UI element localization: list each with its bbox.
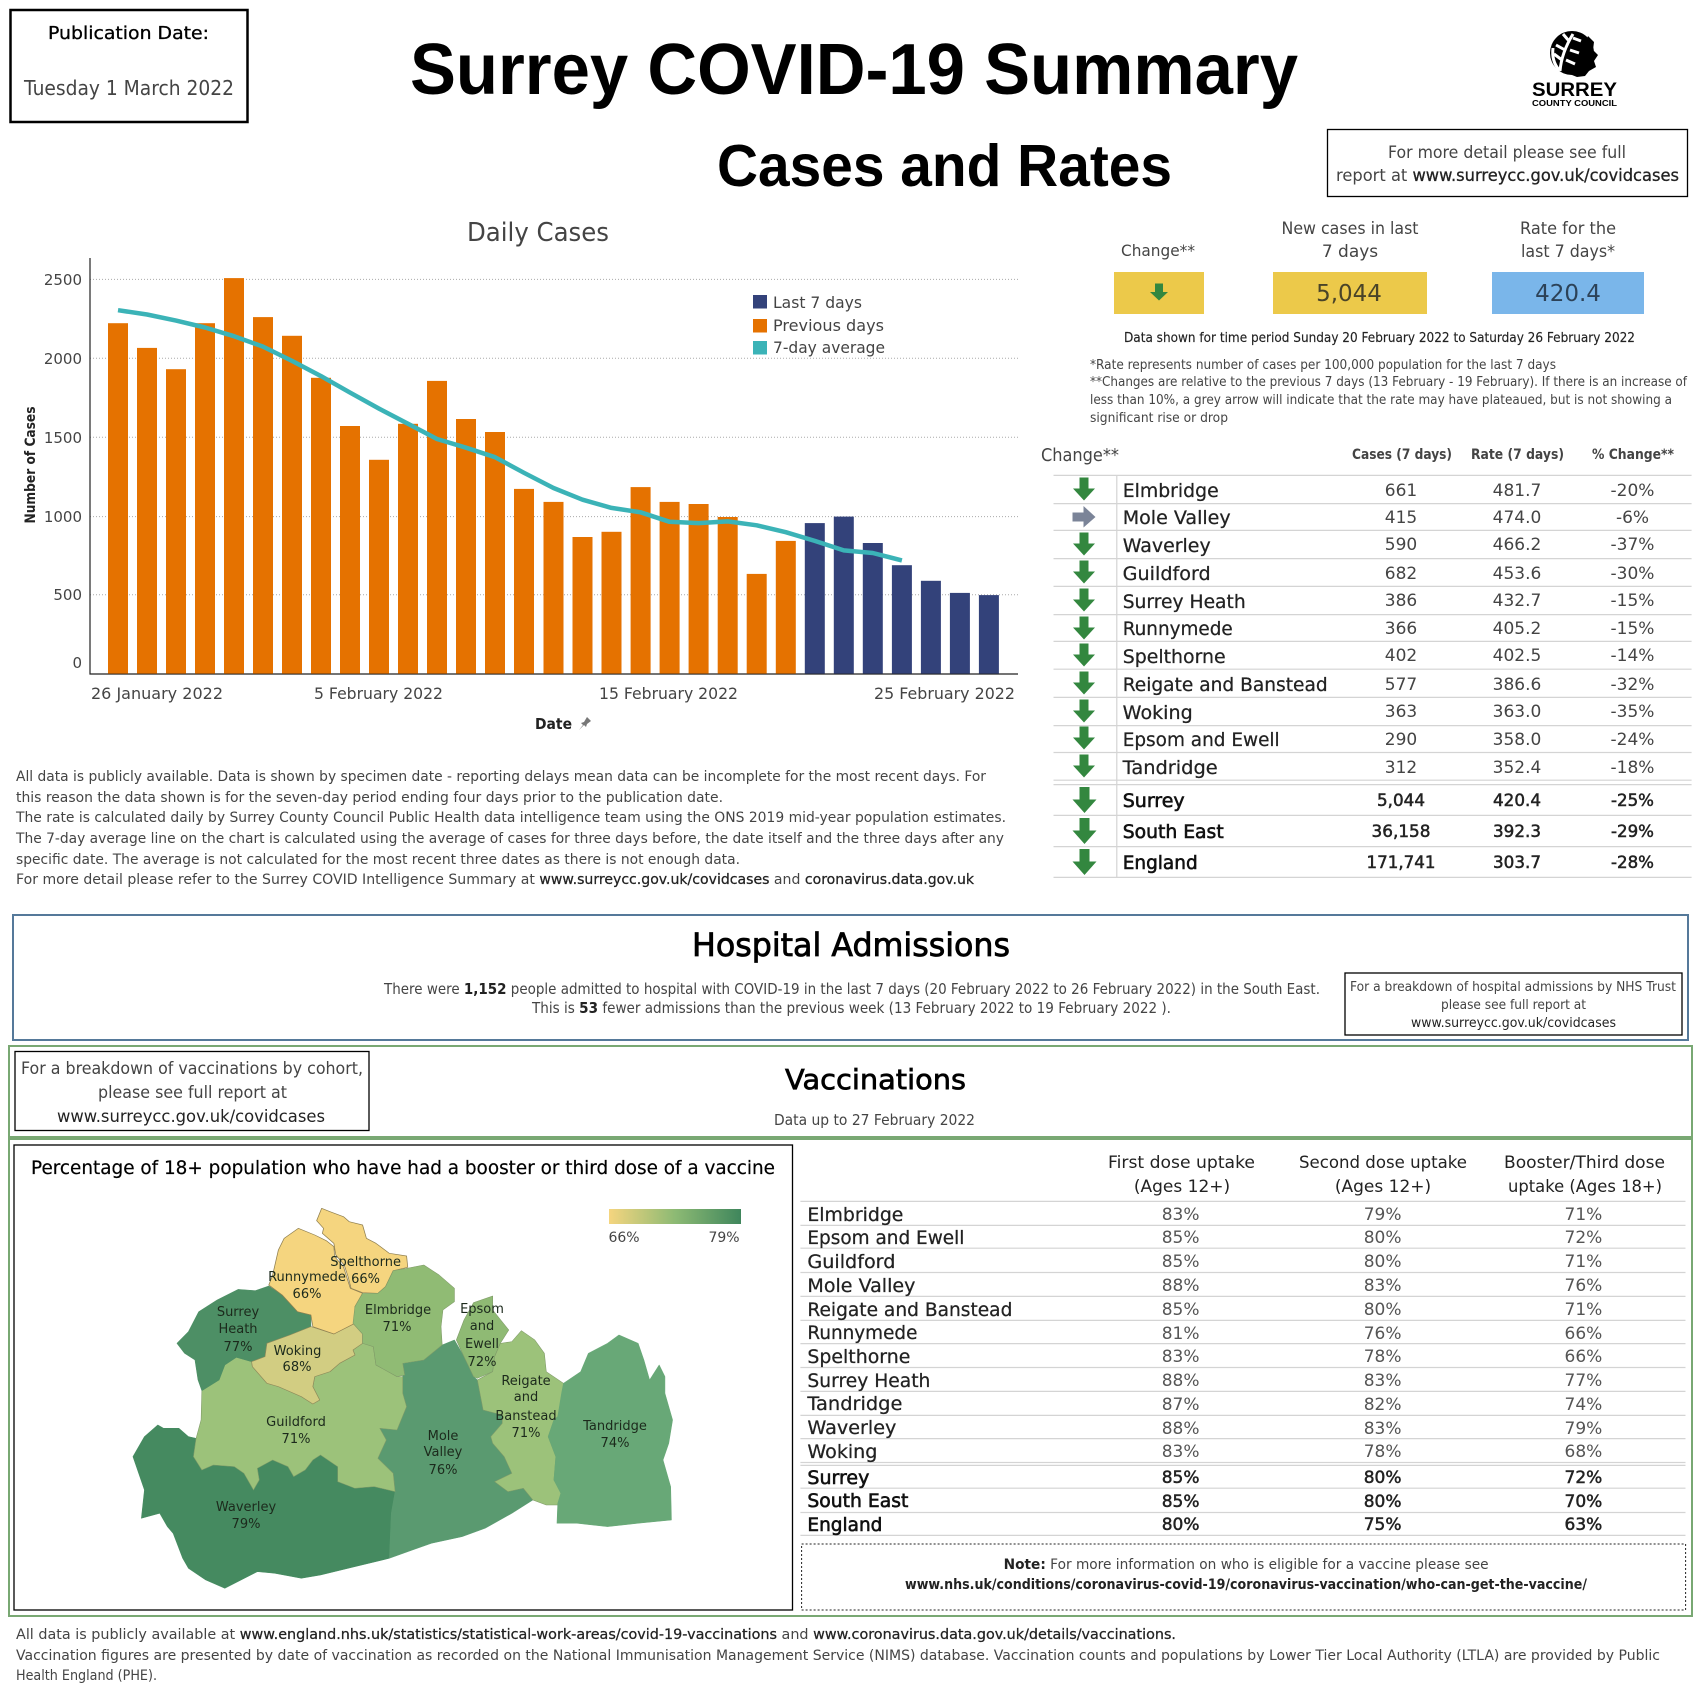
callout: more detail: report at www.surreycc.gov.uk/covidcases — [1336, 166, 1679, 186]
row: Tandridge: Tandridge — [1122, 757, 1218, 779]
map labels: Epsom — [460, 1302, 504, 1317]
map legend: 79% — [708, 1230, 740, 1246]
text block: chart notes: specific date. The average is not calculated for the most recent three dates as there is not enough data. — [16, 852, 740, 868]
data period note: Data shown for time period Sunday 20 February 2022 to Saturday 26 February 2022 — [1124, 330, 1635, 346]
row: Reigate and Banstead: -32% — [1611, 675, 1654, 695]
panel: booster uptake map — [14, 1145, 792, 1610]
row: Spelthorne: 402 — [1385, 646, 1417, 666]
callout: vaccination breakdown: please see full report at — [98, 1083, 287, 1103]
row: Reigate and Banstead: 577 — [1385, 675, 1417, 695]
legend: Last 7 days — [773, 293, 862, 312]
chart title: Daily Cases — [467, 218, 609, 248]
row: Epsom and Ewell: 290 — [1385, 730, 1417, 750]
row: England: 171,741 — [1366, 853, 1436, 873]
callout: vaccine eligibility note: Note: For more information on who is eligible for a vaccine please see — [1004, 1557, 1489, 1573]
row: Epsom and Ewell — [807, 1227, 1602, 1249]
row: South East: 85% — [1162, 1492, 1199, 1512]
row: Spelthorne: 83% — [1162, 1347, 1199, 1367]
row: Reigate and Banstead: 386.6 — [1493, 675, 1541, 695]
row: Surrey: 80% — [1364, 1468, 1401, 1488]
text block: chart notes: this reason the data shown is for the seven-day period ending four days prior to the publication date. — [16, 790, 723, 806]
row: Runnymede — [807, 1322, 1602, 1344]
row: Woking — [1073, 700, 1654, 724]
publication date box — [10, 10, 248, 122]
vaccination table header: Second dose uptake — [1299, 1153, 1467, 1173]
map labels: and — [470, 1319, 494, 1334]
map labels: Valley — [424, 1445, 463, 1460]
y-axis labels: 0 — [72, 654, 82, 672]
row: Waverley: 466.2 — [1493, 535, 1541, 555]
text block: vaccination sources: All data is publicly available at www.england.nhs.uk/statistics/statistical-work-areas/covid-19-vaccinations and www.coronavirus.data.gov.uk/details/vaccinations. — [16, 1627, 1176, 1643]
row: Surrey — [807, 1467, 1602, 1489]
map labels: Mole — [428, 1429, 458, 1444]
row: South East: 392.3 — [1493, 822, 1541, 842]
row: England: 75% — [1364, 1515, 1401, 1535]
callout: more detail: For more detail please see full — [1388, 143, 1626, 163]
row: Spelthorne: 402.5 — [1493, 646, 1541, 666]
vaccination table header — [1108, 1153, 1665, 1197]
row: England: England — [807, 1514, 882, 1536]
data date: Data up to 27 February 2022 — [774, 1111, 975, 1129]
row: Tandridge: Tandridge — [806, 1393, 902, 1415]
map title: Percentage of 18+ population who have had a booster or third dose of a vaccine — [31, 1157, 775, 1179]
map labels: Ewell — [465, 1337, 499, 1352]
hospital summary text: There were 1,152 people admitted to hospital with COVID-19 in the last 7 days (20 February 2022 to 26 February 2022) in the South East. — [383, 980, 1320, 998]
callout: vaccine eligibility note — [802, 1544, 1686, 1610]
row: Woking: 363.0 — [1493, 702, 1541, 722]
row: Spelthorne — [1073, 644, 1654, 668]
row: Waverley: 590 — [1385, 535, 1417, 555]
text block: chart notes: All data is publicly available. Data is shown by specimen date - reporting delays mean data can be incomplete for the most recent days. For — [16, 769, 986, 785]
row: Runnymede: 76% — [1364, 1324, 1401, 1344]
row: Mole Valley — [1072, 506, 1649, 529]
KPI: new cases: New cases in last — [1282, 219, 1419, 239]
row: Surrey Heath: 83% — [1364, 1371, 1401, 1391]
row: Guildford: -30% — [1611, 564, 1654, 584]
x-axis labels: 26 January 2022 — [91, 684, 223, 703]
row: Tandridge: -18% — [1611, 758, 1654, 778]
panel: vaccinations header — [9, 1046, 1692, 1137]
map labels: 76% — [429, 1463, 457, 1478]
row: Waverley — [1073, 532, 1654, 557]
row: South East: 80% — [1364, 1492, 1401, 1512]
title: Surrey COVID-19 Summary — [410, 30, 1298, 110]
row: Reigate and Banstead: 80% — [1364, 1300, 1401, 1320]
text block: vaccination sources: Health England (PHE). — [16, 1668, 157, 1684]
row: Epsom and Ewell — [1073, 726, 1654, 751]
row: Mole Valley: -6% — [1616, 508, 1649, 528]
legend: 7-day average — [773, 338, 885, 357]
row: Runnymede: Runnymede — [1123, 618, 1233, 640]
map labels: 71% — [383, 1320, 411, 1335]
row: Spelthorne: 78% — [1364, 1347, 1401, 1367]
row: Runnymede: Runnymede — [807, 1322, 917, 1344]
row: Surrey: Surrey — [807, 1467, 869, 1489]
publication date box: Publication Date: — [48, 23, 209, 44]
row: Surrey Heath: Surrey Heath — [807, 1370, 930, 1392]
row: South East: 70% — [1565, 1492, 1602, 1512]
row: Tandridge — [806, 1393, 1602, 1415]
x-axis labels — [91, 684, 1015, 703]
row: Guildford: Guildford — [1123, 563, 1211, 585]
legend: Previous days — [773, 316, 884, 335]
row: Waverley: -37% — [1611, 535, 1654, 555]
callout: hospital breakdown: For a breakdown of hospital admissions by NHS Trust — [1350, 980, 1676, 995]
row: Waverley: 79% — [1565, 1419, 1602, 1439]
row: Elmbridge: 71% — [1565, 1205, 1602, 1225]
row: Guildford: 85% — [1162, 1252, 1199, 1272]
row: Runnymede: 81% — [1162, 1324, 1199, 1344]
KPI: new cases: 7 days — [1322, 242, 1378, 262]
x-axis labels: 25 February 2022 — [874, 684, 1015, 703]
row: Spelthorne: Spelthorne — [1123, 646, 1226, 668]
table header: Rate (7 days) — [1471, 447, 1564, 463]
row: Surrey Heath: 88% — [1162, 1371, 1199, 1391]
heading: vaccinations: Vaccinations — [785, 1063, 966, 1096]
row: Mole Valley: 76% — [1565, 1276, 1602, 1296]
row: Elmbridge — [807, 1204, 1602, 1226]
y-axis labels: 2000 — [44, 350, 82, 368]
KPI: change — [1114, 241, 1204, 314]
row: England — [1072, 849, 1654, 875]
table header — [1041, 445, 1675, 466]
callout: vaccination breakdown: www.surreycc.gov.uk/covidcases — [57, 1107, 325, 1127]
line: 7-day average — [118, 310, 902, 560]
row: Reigate and Banstead — [807, 1299, 1602, 1321]
map labels: 77% — [224, 1340, 252, 1355]
row: Mole Valley — [807, 1275, 1602, 1297]
callout: hospital breakdown: www.surreycc.gov.uk/covidcases — [1411, 1016, 1616, 1031]
row: Reigate and Banstead — [1073, 672, 1654, 696]
vaccination table header: Booster/Third dose — [1504, 1153, 1665, 1173]
row: Guildford — [1073, 560, 1654, 585]
y-axis labels: 1500 — [44, 429, 82, 447]
table: vaccination uptake — [800, 1153, 1686, 1536]
rate footnotes: *Rate represents number of cases per 100,000 population for the last 7 days — [1090, 358, 1556, 373]
row: Waverley: Waverley — [807, 1417, 896, 1439]
callout: more detail — [1328, 130, 1688, 196]
text block: chart notes — [15, 769, 1006, 888]
row: Guildford: 80% — [1364, 1252, 1401, 1272]
map labels: 68% — [283, 1360, 311, 1375]
row: Reigate and Banstead: 85% — [1162, 1300, 1199, 1320]
y-axis labels: 1000 — [44, 508, 82, 526]
publication date box: Tuesday 1 March 2022 — [23, 76, 234, 100]
row: Surrey Heath: Surrey Heath — [1123, 591, 1246, 613]
row: England: -28% — [1611, 853, 1654, 873]
y-axis labels — [44, 271, 82, 672]
row: England: 80% — [1162, 1515, 1199, 1535]
row: Runnymede: 366 — [1385, 619, 1417, 639]
map labels: Woking — [274, 1344, 321, 1359]
row: Elmbridge: 83% — [1162, 1205, 1199, 1225]
hospital summary text: This is 53 fewer admissions than the previous week (13 February 2022 to 19 February 2022 ). — [531, 999, 1171, 1017]
map labels: and — [514, 1390, 538, 1405]
row: Reigate and Banstead: Reigate and Banstead — [807, 1299, 1012, 1321]
row: Waverley: 88% — [1162, 1419, 1199, 1439]
map labels: 66% — [293, 1287, 321, 1302]
bars: last 7 days — [805, 517, 999, 674]
row: Surrey Heath — [1073, 588, 1654, 613]
row: Epsom and Ewell: 85% — [1162, 1228, 1199, 1248]
text block: vaccination sources — [16, 1627, 1660, 1684]
y-axis labels: 2500 — [44, 271, 82, 289]
row: Tandridge: 82% — [1364, 1395, 1401, 1415]
row: Mole Valley: 88% — [1162, 1276, 1199, 1296]
row: Tandridge: 352.4 — [1493, 758, 1541, 778]
map labels: Elmbridge — [365, 1303, 431, 1318]
rate footnotes: significant rise or drop — [1090, 411, 1228, 426]
row: Elmbridge: Elmbridge — [807, 1204, 903, 1226]
row: Guildford: Guildford — [807, 1251, 895, 1273]
row: Tandridge — [1073, 754, 1654, 779]
rate footnotes: less than 10%, a grey arrow will indicate that the rate may have plateaued, but is not showing a — [1090, 393, 1672, 408]
row: Runnymede: 66% — [1565, 1324, 1602, 1344]
row: Epsom and Ewell: Epsom and Ewell — [1123, 729, 1280, 751]
table header: % Change** — [1592, 447, 1675, 463]
row: Surrey Heath: 432.7 — [1493, 591, 1541, 611]
row: Surrey: Surrey — [1123, 790, 1185, 812]
row: Tandridge: 87% — [1162, 1395, 1199, 1415]
row: Surrey Heath — [807, 1370, 1602, 1392]
row: Woking: Woking — [1123, 702, 1193, 724]
row: Elmbridge: -20% — [1611, 481, 1654, 501]
x-axis labels: 5 February 2022 — [314, 684, 443, 703]
text block: vaccination sources: Vaccination figures are presented by date of vaccination as recorded on the National Immunisation Management Service (NIMS) database. Vaccination counts and populations by Lower Tier Local Authority (LTLA) are provided by Public — [16, 1648, 1660, 1664]
icon: Surrey County Council logo — [1532, 31, 1617, 108]
y-axis labels: 500 — [53, 586, 82, 604]
callout: vaccination breakdown: For a breakdown of vaccinations by cohort, — [21, 1059, 363, 1079]
row: Waverley — [807, 1417, 1602, 1439]
row: South East: South East — [1123, 821, 1224, 843]
map labels: 71% — [282, 1432, 310, 1447]
callout: hospital breakdown: please see full report at — [1441, 998, 1586, 1013]
row: Reigate and Banstead: 71% — [1565, 1300, 1602, 1320]
row: Mole Valley: 415 — [1385, 508, 1417, 528]
hospital summary text — [383, 980, 1320, 1017]
row: Woking: 68% — [1565, 1442, 1602, 1462]
row: Surrey — [1072, 787, 1654, 813]
row: Elmbridge: Elmbridge — [1123, 480, 1219, 502]
vaccination table header: First dose uptake — [1108, 1153, 1255, 1173]
row: Surrey: 72% — [1565, 1468, 1602, 1488]
row: Tandridge: 312 — [1385, 758, 1417, 778]
panel: vaccination outer frame — [9, 1139, 1692, 1616]
panel: daily cases chart — [23, 218, 1018, 733]
row: Surrey Heath: 386 — [1385, 591, 1417, 611]
vaccination table header: (Ages 12+) — [1335, 1177, 1431, 1197]
map labels: Surrey — [217, 1305, 259, 1320]
row: South East: South East — [807, 1490, 908, 1512]
row: Surrey: 85% — [1162, 1468, 1199, 1488]
row: Guildford: 71% — [1565, 1252, 1602, 1272]
row: South East — [807, 1490, 1602, 1512]
row: Epsom and Ewell: 80% — [1364, 1228, 1401, 1248]
x-axis title: Date — [535, 715, 572, 733]
row: England: 303.7 — [1493, 853, 1541, 873]
row: Woking: 83% — [1162, 1442, 1199, 1462]
icon: Surrey County Council logo: SURREY — [1532, 80, 1617, 101]
row: Woking: Woking — [807, 1441, 877, 1463]
map labels: 74% — [601, 1436, 629, 1451]
row: Elmbridge: 661 — [1385, 481, 1417, 501]
icon: Surrey County Council logo: COUNTY COUNCIL — [1532, 99, 1617, 108]
map labels: 66% — [351, 1272, 380, 1287]
row: Surrey Heath: -15% — [1611, 591, 1654, 611]
map labels: 79% — [232, 1517, 260, 1532]
row: Epsom and Ewell: 358.0 — [1493, 730, 1541, 750]
callout: vaccination breakdown — [15, 1052, 369, 1130]
KPI: rate: Rate for the — [1520, 219, 1616, 239]
KPI: rate: last 7 days* — [1521, 242, 1615, 262]
map labels: 71% — [512, 1426, 540, 1441]
map legend: 66% — [608, 1230, 640, 1246]
KPI: new cases: 5,044 — [1316, 281, 1382, 307]
row: South East: -29% — [1611, 822, 1654, 842]
row: Runnymede: -15% — [1611, 619, 1654, 639]
row: Waverley: 83% — [1364, 1419, 1401, 1439]
row: Elmbridge: 481.7 — [1493, 481, 1541, 501]
rate footnotes — [1090, 358, 1687, 426]
row: Runnymede: 405.2 — [1493, 619, 1541, 639]
row: Waverley: Waverley — [1123, 535, 1211, 557]
row: Surrey: 420.4 — [1493, 791, 1541, 811]
table header: Change** — [1041, 445, 1119, 466]
heading: hospital admissions: Hospital Admissions — [692, 926, 1010, 964]
row: Surrey: 5,044 — [1377, 791, 1425, 811]
map labels: Heath — [218, 1322, 258, 1337]
map labels: Tandridge — [582, 1419, 647, 1434]
vaccination table header: (Ages 12+) — [1134, 1177, 1230, 1197]
map labels: Spelthorne — [330, 1255, 401, 1270]
text block: chart notes: The rate is calculated daily by Surrey County Council Public Health data intelligence team using the ONS 2019 mid-year population estimates. — [15, 810, 1006, 826]
row: Tandridge: 74% — [1565, 1395, 1602, 1415]
map labels — [216, 1255, 647, 1532]
row: England — [807, 1514, 1602, 1536]
map labels: Guildford — [266, 1415, 326, 1430]
table header: Cases (7 days) — [1352, 447, 1452, 463]
row: Mole Valley: Mole Valley — [1123, 507, 1231, 529]
row: Reigate and Banstead: Reigate and Banstead — [1123, 674, 1328, 696]
row: Mole Valley: 474.0 — [1493, 508, 1541, 528]
map: Surrey districts — [133, 1208, 673, 1588]
row: Spelthorne: 66% — [1565, 1347, 1602, 1367]
KPI: rate — [1492, 219, 1644, 314]
heading: cases and rates: Cases and Rates — [717, 133, 1172, 199]
x-axis labels: 15 February 2022 — [599, 684, 738, 703]
row: Mole Valley: Mole Valley — [807, 1275, 915, 1297]
row: Surrey Heath: 77% — [1565, 1371, 1602, 1391]
row: South East: 36,158 — [1372, 822, 1430, 842]
table: district cases and rates — [1041, 445, 1692, 877]
map labels: Waverley — [216, 1500, 276, 1515]
row: Epsom and Ewell: -24% — [1611, 730, 1654, 750]
row: England: 63% — [1565, 1515, 1602, 1535]
row: Mole Valley: 83% — [1364, 1276, 1401, 1296]
KPI: rate: 420.4 — [1535, 281, 1601, 307]
row: Spelthorne — [807, 1346, 1602, 1368]
y-axis title: Number of Cases — [23, 406, 39, 524]
map labels: 72% — [468, 1355, 496, 1370]
row: Spelthorne: Spelthorne — [807, 1346, 910, 1368]
map labels: Reigate — [501, 1374, 551, 1389]
map labels: Runnymede — [268, 1270, 346, 1285]
row: Woking: 78% — [1364, 1442, 1401, 1462]
row: South East — [1072, 818, 1654, 844]
row: Woking: 363 — [1385, 702, 1417, 722]
row: Elmbridge — [1073, 478, 1654, 502]
map legend — [608, 1209, 741, 1246]
row: Guildford — [807, 1251, 1602, 1273]
row: Woking: -35% — [1611, 702, 1654, 722]
callout: vaccine eligibility note: www.nhs.uk/conditions/coronavirus-covid-19/coronavirus-vaccination/who-can-get-the-vaccine/ — [905, 1577, 1588, 1593]
row: Guildford: 682 — [1385, 564, 1417, 584]
vaccination table header: uptake (Ages 18+) — [1508, 1177, 1662, 1197]
row: Woking — [807, 1441, 1602, 1463]
row: Surrey: -25% — [1611, 791, 1654, 811]
panel: hospital admissions — [13, 915, 1688, 1040]
row: Epsom and Ewell: 72% — [1565, 1228, 1602, 1248]
legend — [753, 293, 885, 357]
grid and axes — [90, 258, 1018, 674]
bars: previous days — [108, 278, 796, 674]
map labels: Banstead — [495, 1409, 557, 1424]
row: Elmbridge: 79% — [1364, 1205, 1401, 1225]
row: Epsom and Ewell: Epsom and Ewell — [807, 1227, 964, 1249]
panel: headline KPIs — [1090, 219, 1687, 426]
KPI: new cases — [1273, 219, 1427, 314]
callout: hospital breakdown — [1345, 973, 1682, 1035]
row: Runnymede — [1073, 616, 1654, 640]
text block: chart notes: For more detail please refer to the Surrey COVID Intelligence Summary at www.surreycc.gov.uk/covidcases and coronavirus.data.gov.uk — [16, 872, 975, 888]
text block: chart notes: The 7-day average line on the chart is calculated using the average of cases for three days before, the date itself and the three days after any — [15, 831, 1004, 847]
row: Guildford: 453.6 — [1493, 564, 1541, 584]
row: Spelthorne: -14% — [1611, 646, 1654, 666]
row: England: England — [1123, 852, 1198, 874]
KPI: change: Change** — [1121, 241, 1195, 260]
